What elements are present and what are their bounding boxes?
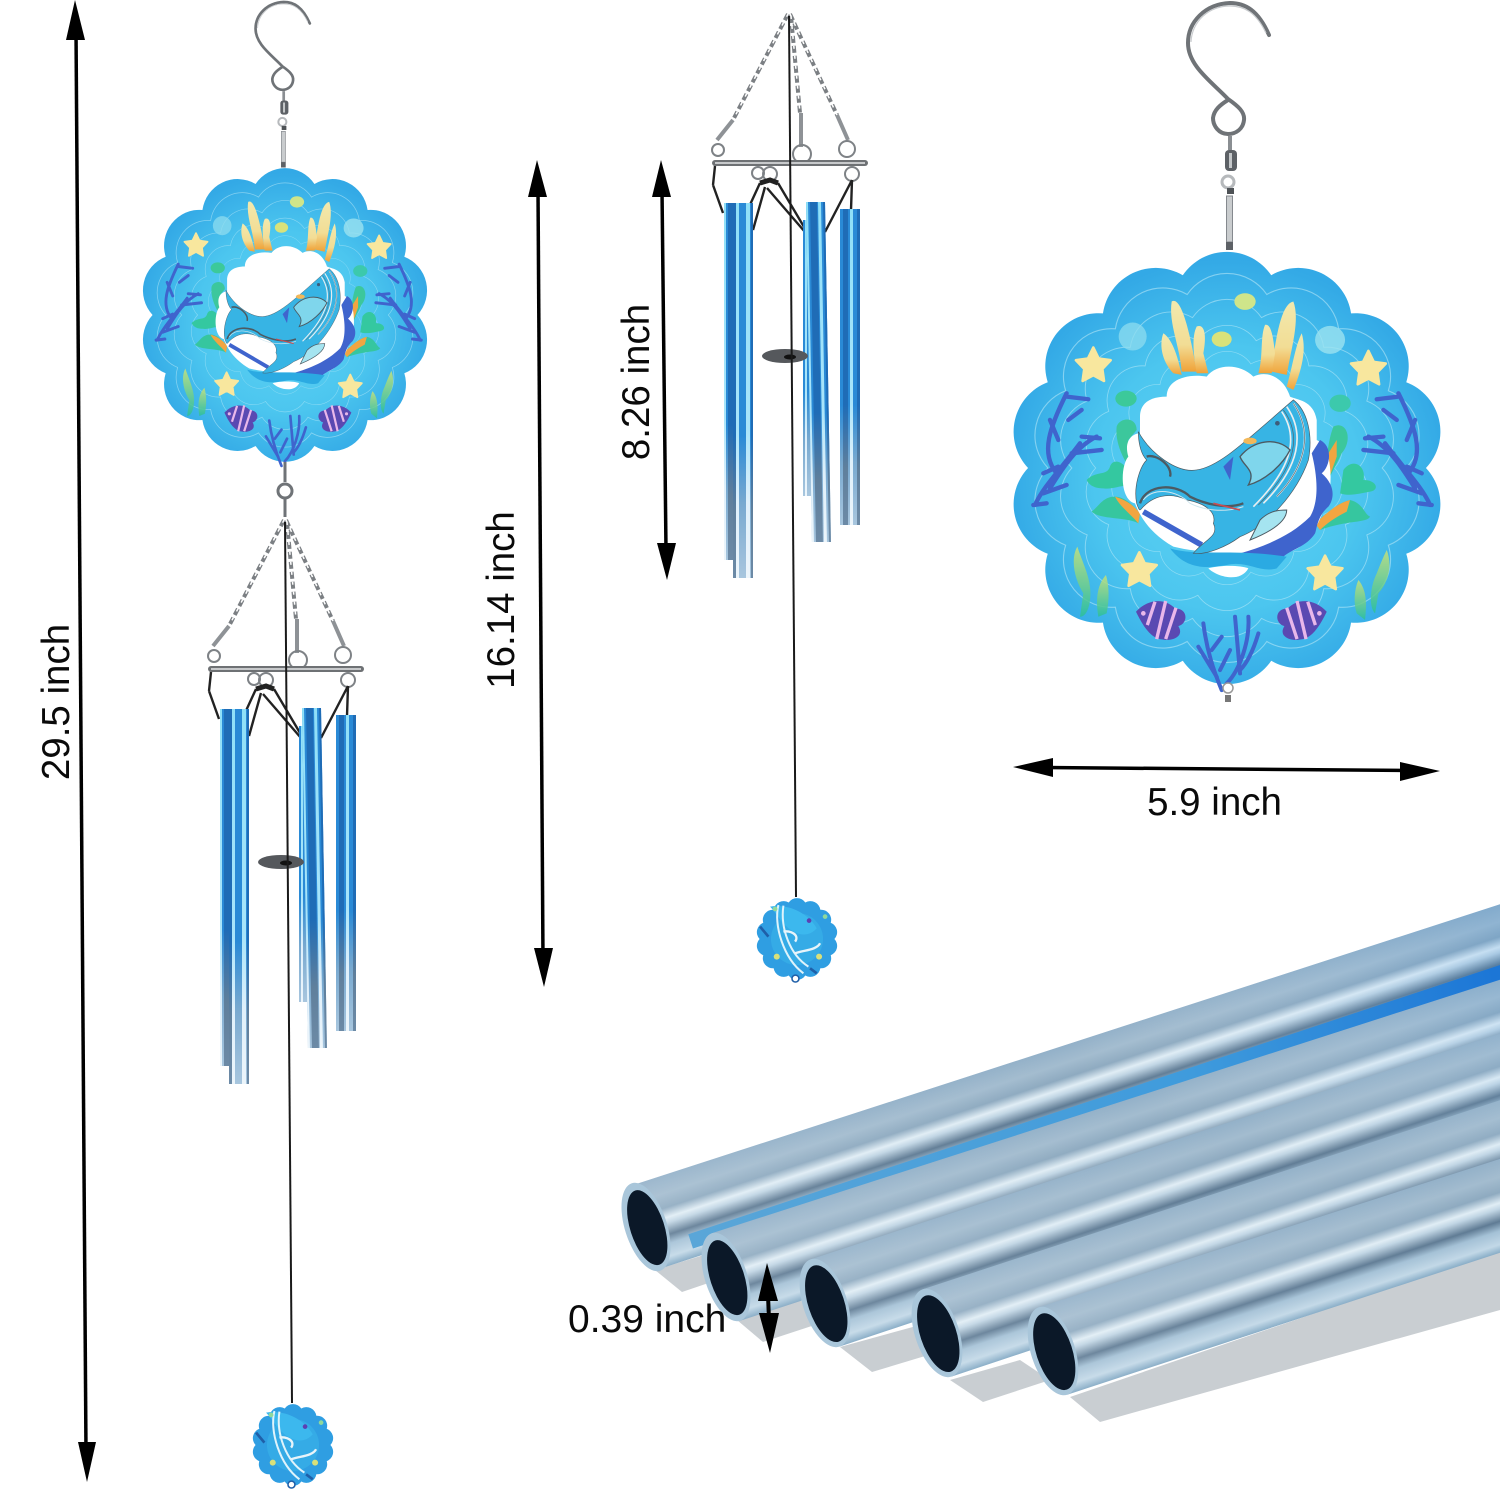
arrow: chime height (528, 160, 553, 987)
small shells and clouds (1115, 293, 1351, 412)
fish right (1277, 601, 1327, 640)
wind chime, centre view (712, 14, 868, 982)
tube 3 (790, 945, 1500, 1354)
tube: front left long (733, 203, 753, 578)
wave contour lines (1035, 273, 1419, 663)
starfish (1076, 348, 1386, 589)
clapper disc (762, 349, 808, 363)
fish left (1136, 601, 1185, 640)
lower cut-out and wave (1170, 548, 1287, 570)
disc artwork (1033, 293, 1432, 690)
wind chime, full height view (208, 520, 364, 1488)
tube: front left short (724, 203, 734, 560)
green and orange leaves left (1087, 419, 1140, 523)
tube 2 (692, 924, 1500, 1327)
small spinner hook (256, 2, 310, 168)
green and orange leaves right (1315, 425, 1376, 530)
label: 16.14 inch: 16.14 inch (480, 511, 523, 689)
chime tubes (724, 202, 860, 578)
white cut-out (1123, 367, 1331, 557)
top ring (712, 160, 868, 166)
large spinner hook (1188, 3, 1269, 250)
connector between disc and chime (278, 462, 292, 517)
bottom ring of large disc (1223, 683, 1233, 702)
coral left (1033, 393, 1102, 505)
orange seaweed left (1161, 301, 1208, 375)
arrow: tube diameter (758, 1263, 779, 1353)
blue shell behind whale (1240, 440, 1333, 557)
coral right (1363, 393, 1432, 505)
tube 5 (1018, 998, 1500, 1402)
small rings and strings (713, 166, 859, 240)
label: 29.5 inch: 29.5 inch (35, 624, 78, 780)
chains (712, 14, 855, 163)
pendulum line (789, 16, 796, 897)
coral bottom (1198, 617, 1258, 690)
tiny sail disc (757, 898, 837, 982)
green seaweed bottom (1074, 547, 1389, 620)
tube: middle (806, 202, 831, 542)
tube 4 (902, 975, 1500, 1384)
arrow: overall height (66, 0, 96, 1482)
label: 5.9 inch: 5.9 inch (1147, 781, 1282, 824)
arrow: tube length (652, 160, 676, 580)
tube: short back right (803, 220, 811, 496)
label: 0.39 inch: 0.39 inch (568, 1298, 726, 1341)
label: 8.26 inch: 8.26 inch (615, 304, 658, 460)
large spinner disc (1014, 252, 1440, 690)
tube: right (840, 209, 860, 525)
whale on tiny disc (760, 905, 827, 973)
small spinner disc (143, 168, 427, 466)
orange seaweed right (1258, 302, 1304, 390)
arrow: disc width (1013, 758, 1440, 781)
tube 1 (612, 874, 1500, 1277)
tube shadows (655, 1250, 1500, 1422)
whale tail stripe (1143, 512, 1202, 545)
disc scalloped background (1014, 252, 1440, 684)
close-up aluminium tubes (612, 874, 1500, 1422)
whale (1136, 400, 1310, 554)
